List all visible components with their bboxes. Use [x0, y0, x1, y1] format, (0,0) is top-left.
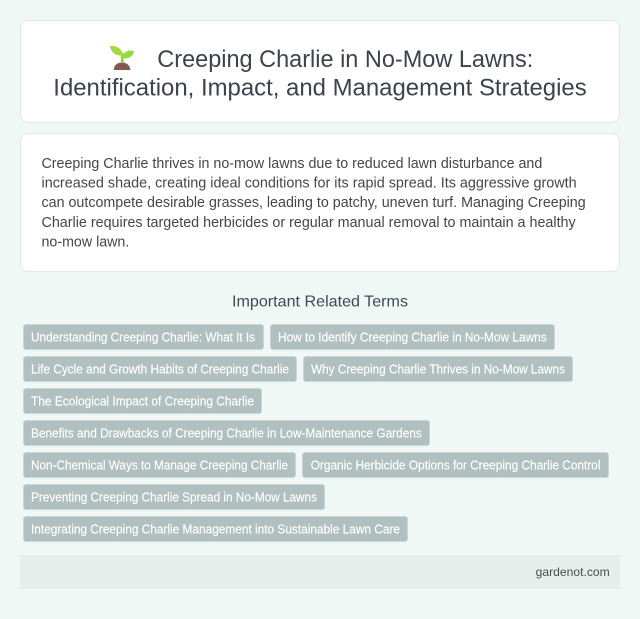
footer — [20, 555, 620, 589]
tag: ecological impact: The Ecological Impact of Creeping Charlie — [31, 394, 254, 408]
tag: life cycle: Life Cycle and Growth Habits of Creeping Charlie — [31, 362, 289, 376]
title: Identification, Impact, and Management Strategies — [53, 74, 587, 102]
tag: organic herbicide — [302, 452, 608, 478]
title: Creeping Charlie in No-Mow Lawns: — [157, 46, 533, 73]
panel: summary card — [20, 134, 620, 272]
icon: seedling — [110, 46, 134, 70]
tag: identify: How to Identify Creeping Charlie in No-Mow Lawns — [278, 330, 547, 344]
tag: understanding — [24, 324, 264, 350]
tag list — [24, 324, 608, 542]
tag: integrating management — [24, 516, 408, 542]
tag: understanding: Understanding Creeping Charlie: What It Is — [31, 330, 255, 344]
summary text: can outcompete desirable grasses, leading to patchy, uneven turf. Managing Creeping — [42, 195, 586, 211]
summary text: no-mow lawn. — [42, 234, 129, 250]
tag: benefits and drawbacks — [24, 420, 430, 446]
tag: why it thrives — [304, 356, 572, 382]
tag: non-chemical: Non-Chemical Ways to Manage Creeping Charlie — [31, 458, 288, 472]
tag: non-chemical — [24, 452, 296, 478]
tag: benefits and drawbacks: Benefits and Drawbacks of Creeping Charlie in Low-Maintenance Gardens — [31, 426, 422, 440]
summary text: Charlie requires targeted herbicides or regular manual removal to maintain a healthy — [42, 215, 577, 231]
tag: ecological impact — [24, 388, 262, 414]
tag: preventing spread — [24, 484, 324, 510]
heading: important related terms: Important Related Terms — [232, 294, 408, 310]
tag: preventing spread: Preventing Creeping Charlie Spread in No-Mow Lawns — [31, 490, 317, 504]
panel: title card — [20, 20, 620, 122]
summary text: Creeping Charlie thrives in no-mow lawns due to reduced lawn disturbance and — [42, 156, 542, 172]
tag: integrating management: Integrating Creeping Charlie Management into Sustainable Lawn Care — [31, 522, 400, 536]
summary text — [42, 156, 586, 250]
tag: why it thrives: Why Creeping Charlie Thrives in No-Mow Lawns — [311, 362, 565, 376]
title — [53, 46, 587, 102]
tag: organic herbicide: Organic Herbicide Options for Creeping Charlie Control — [311, 458, 600, 472]
summary text: increased shade, creating ideal conditions for its rapid spread. Its aggressive growth — [42, 176, 577, 192]
footer source: gardenot.com — [536, 565, 610, 579]
tag: identify — [270, 324, 554, 350]
tag: life cycle — [24, 356, 296, 382]
